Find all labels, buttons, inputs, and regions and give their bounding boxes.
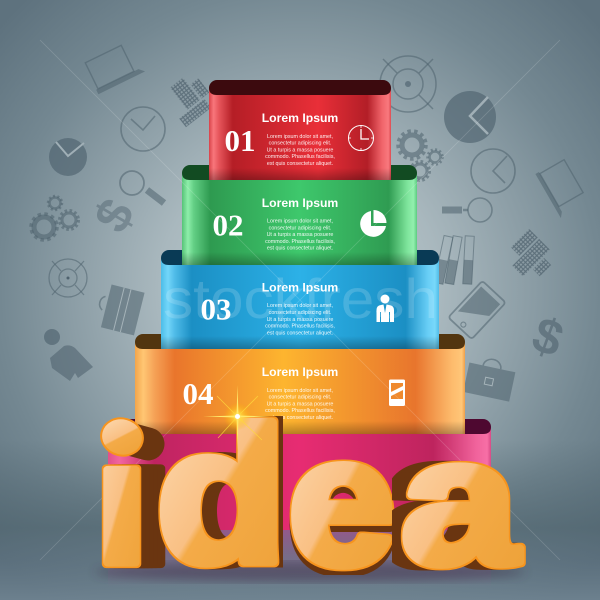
watermark: stockfresh — [163, 267, 438, 330]
body text 03 — [265, 303, 335, 336]
floor — [0, 440, 600, 600]
number 04: 04 — [182, 376, 214, 411]
ribbon back caps — [108, 80, 491, 441]
icon: briefcase right — [463, 355, 517, 402]
icon: gears left — [31, 196, 78, 240]
body text 02: consectetur adipiscing elit. — [269, 225, 331, 231]
icon: person — [376, 294, 394, 322]
icon: magnifier right — [442, 198, 492, 222]
body text 04 — [265, 388, 335, 421]
icon: dollar left: $ — [83, 189, 146, 242]
letter shadow — [95, 562, 525, 582]
ribbon 02: green — [182, 173, 417, 265]
ribbon 01: red — [209, 88, 391, 180]
icon: pie left — [49, 138, 87, 176]
number 01: 01 — [224, 123, 256, 158]
number 03: 03 — [200, 292, 232, 326]
body text 01: Ut a turpis a massa posuere — [267, 147, 333, 153]
body text 04: commodo. Phasellus facilisis, — [265, 408, 335, 414]
body text 03: est quis consectetur aliquet. — [267, 330, 333, 336]
body text 03: Lorem ipsum dolor sit amet, — [267, 303, 333, 309]
body text 04: consectetur adipiscing elit. — [269, 395, 331, 401]
icon: person left — [44, 329, 93, 381]
heading 02: Lorem Ipsum — [262, 196, 338, 210]
icon: tablet — [448, 281, 506, 339]
icon: keyboard right — [502, 229, 558, 285]
body text 01: commodo. Phasellus facilisis, — [265, 154, 335, 160]
body text 03: commodo. Phasellus facilisis, — [265, 324, 335, 330]
icon: laptop right — [535, 158, 589, 218]
letter i dot — [97, 414, 148, 460]
icon: target right — [380, 56, 436, 112]
icon: dollar right: $ — [525, 306, 571, 368]
background business icons — [31, 41, 589, 402]
icon: smartphone — [389, 380, 405, 406]
body text 02: commodo. Phasellus facilisis, — [265, 239, 335, 245]
number 02: 02 — [212, 208, 244, 242]
letter e: e — [288, 398, 395, 600]
letter i: i — [94, 404, 149, 600]
icon: magnifier left — [120, 171, 164, 203]
sparkle — [203, 385, 270, 450]
heading 01: Lorem Ipsum — [262, 111, 338, 125]
icon: gears right — [398, 131, 442, 180]
body text 01: Lorem ipsum dolor sit amet, — [267, 134, 333, 140]
body text 02: Lorem ipsum dolor sit amet, — [267, 218, 333, 224]
icon: binders — [434, 235, 474, 285]
icon: laptop left — [83, 41, 145, 94]
icon: target left — [49, 259, 87, 297]
body text 03: Ut a turpis a massa posuere — [267, 317, 333, 323]
letter a: a — [401, 402, 520, 600]
body text 04: Lorem ipsum dolor sit amet, — [267, 388, 333, 394]
ribbon 03: blue — [161, 258, 439, 349]
body text 01: consectetur adipiscing elit. — [269, 141, 331, 147]
watermark diagonals — [40, 40, 560, 560]
icon: pie right — [444, 91, 496, 143]
word: idea — [100, 416, 526, 575]
icon: clock right — [471, 149, 515, 193]
icon: clock — [348, 126, 374, 150]
body text 02 — [265, 218, 335, 252]
letter d: d — [156, 389, 287, 600]
floor reflection — [108, 530, 491, 588]
heading 04: Lorem Ipsum — [262, 365, 338, 379]
icon: keyboard left — [161, 70, 217, 127]
icon: clock left — [121, 107, 165, 151]
body text 01: est quis consectetur aliquet. — [267, 161, 333, 167]
ribbon 05: pink — [108, 427, 491, 530]
body text 02: Ut a turpis a massa posuere — [267, 232, 333, 238]
body text 04: Ut a turpis a massa posuere — [267, 401, 333, 407]
body text 03: consectetur adipiscing elit. — [269, 310, 331, 316]
body text 04: est quis consectetur aliquet. — [267, 415, 333, 421]
ribbon 04: orange — [135, 342, 465, 434]
icon: briefcase left — [94, 283, 145, 335]
body text 01 — [265, 134, 335, 167]
icon: pie chart — [360, 210, 386, 237]
body text 02: est quis consectetur aliquet. — [267, 246, 333, 252]
heading 03: Lorem Ipsum — [262, 280, 338, 294]
